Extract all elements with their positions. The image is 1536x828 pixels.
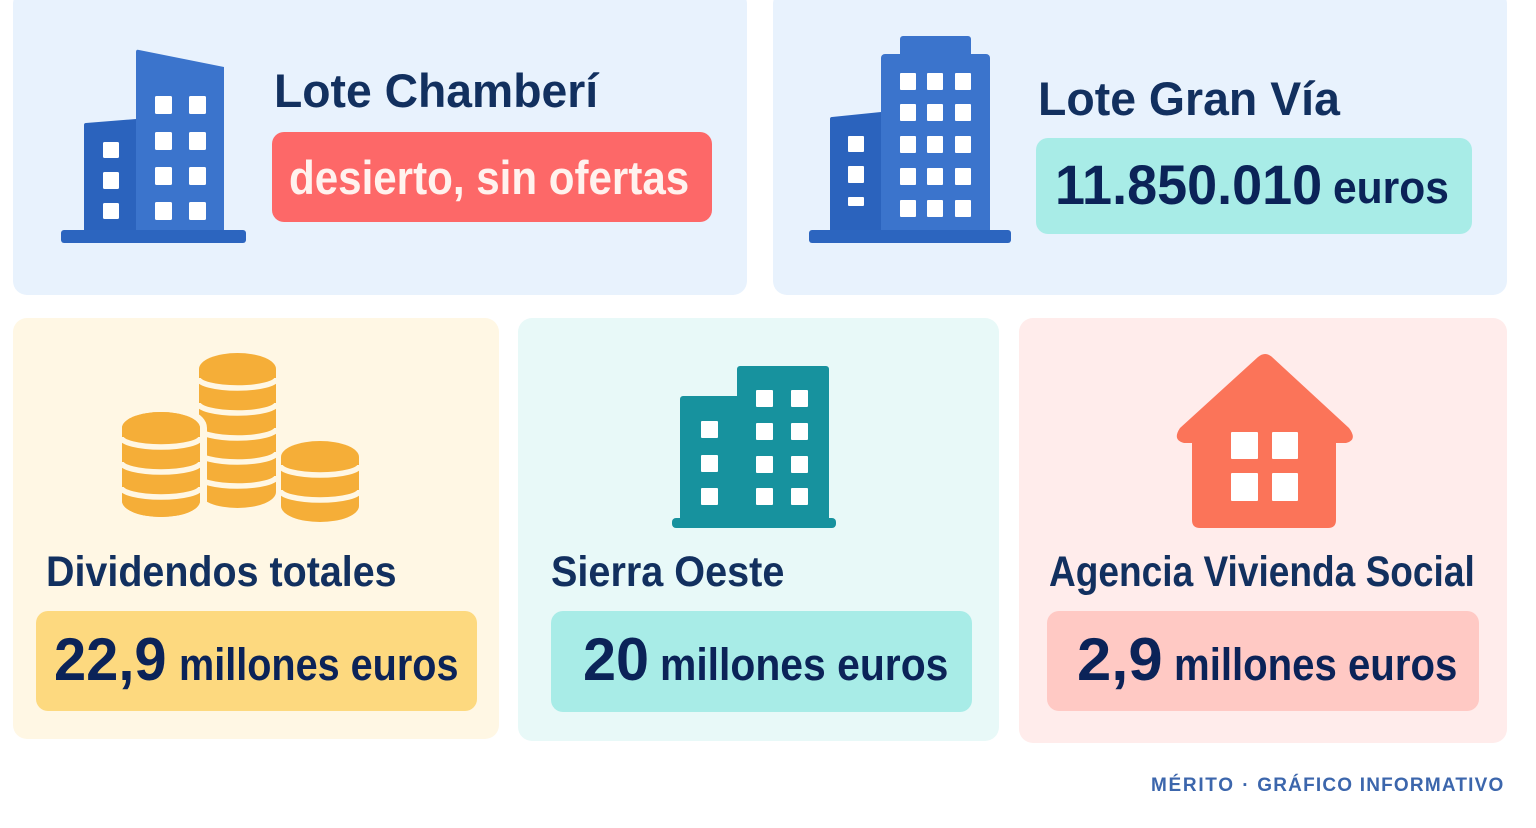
heading: Dividendos totales: Dividendos totales: [46, 548, 397, 596]
panel: Lote Gran Vía: [773, 0, 1507, 295]
panel: Lote Chamberí: [13, 0, 747, 295]
value: 22,9: 22,9: [54, 626, 167, 693]
badge: 2,9 millones euros: [1047, 611, 1479, 711]
unit: millones euros: millones euros: [179, 639, 458, 690]
badge: desierto, sin ofertas: desierto, sin ofertas: [289, 151, 689, 204]
icon: building right: [809, 36, 1011, 243]
heading: Lote Gran Vía: Lote Gran Vía: [1038, 72, 1340, 125]
panel: Dividendos totales: [13, 318, 499, 739]
icon: teal building: [672, 366, 836, 528]
heading: Lote Chamberí: Lote Chamberí: [274, 64, 598, 117]
icon: building left: [61, 50, 246, 243]
heading: Agencia Vivienda Social: Agencia Vivienda Social: [1049, 548, 1475, 596]
unit: millones euros: millones euros: [660, 639, 948, 690]
value: 20: 20: [583, 626, 649, 693]
footer credit: MÉRITO · GRÁFICO INFORMATIVO: [1151, 775, 1505, 796]
value: 11.850.010: 11.850.010: [1055, 153, 1322, 216]
unit: millones euros: millones euros: [1174, 639, 1457, 690]
panel: Sierra Oeste: [518, 318, 999, 741]
badge: 20 millones euros: [551, 611, 972, 712]
icon: house: [1177, 354, 1353, 528]
panel: Agencia Vivienda Social: [1019, 318, 1507, 743]
badge: 22,9 millones euros: [36, 611, 477, 711]
heading: Sierra Oeste: Sierra Oeste: [551, 548, 784, 596]
icon: coins: [121, 353, 360, 522]
badge: 11.850.010 euros: [1036, 138, 1472, 234]
value: 2,9: 2,9: [1077, 626, 1163, 693]
badge: desierto, sin ofertas: [272, 132, 712, 222]
unit: euros: euros: [1333, 162, 1449, 213]
